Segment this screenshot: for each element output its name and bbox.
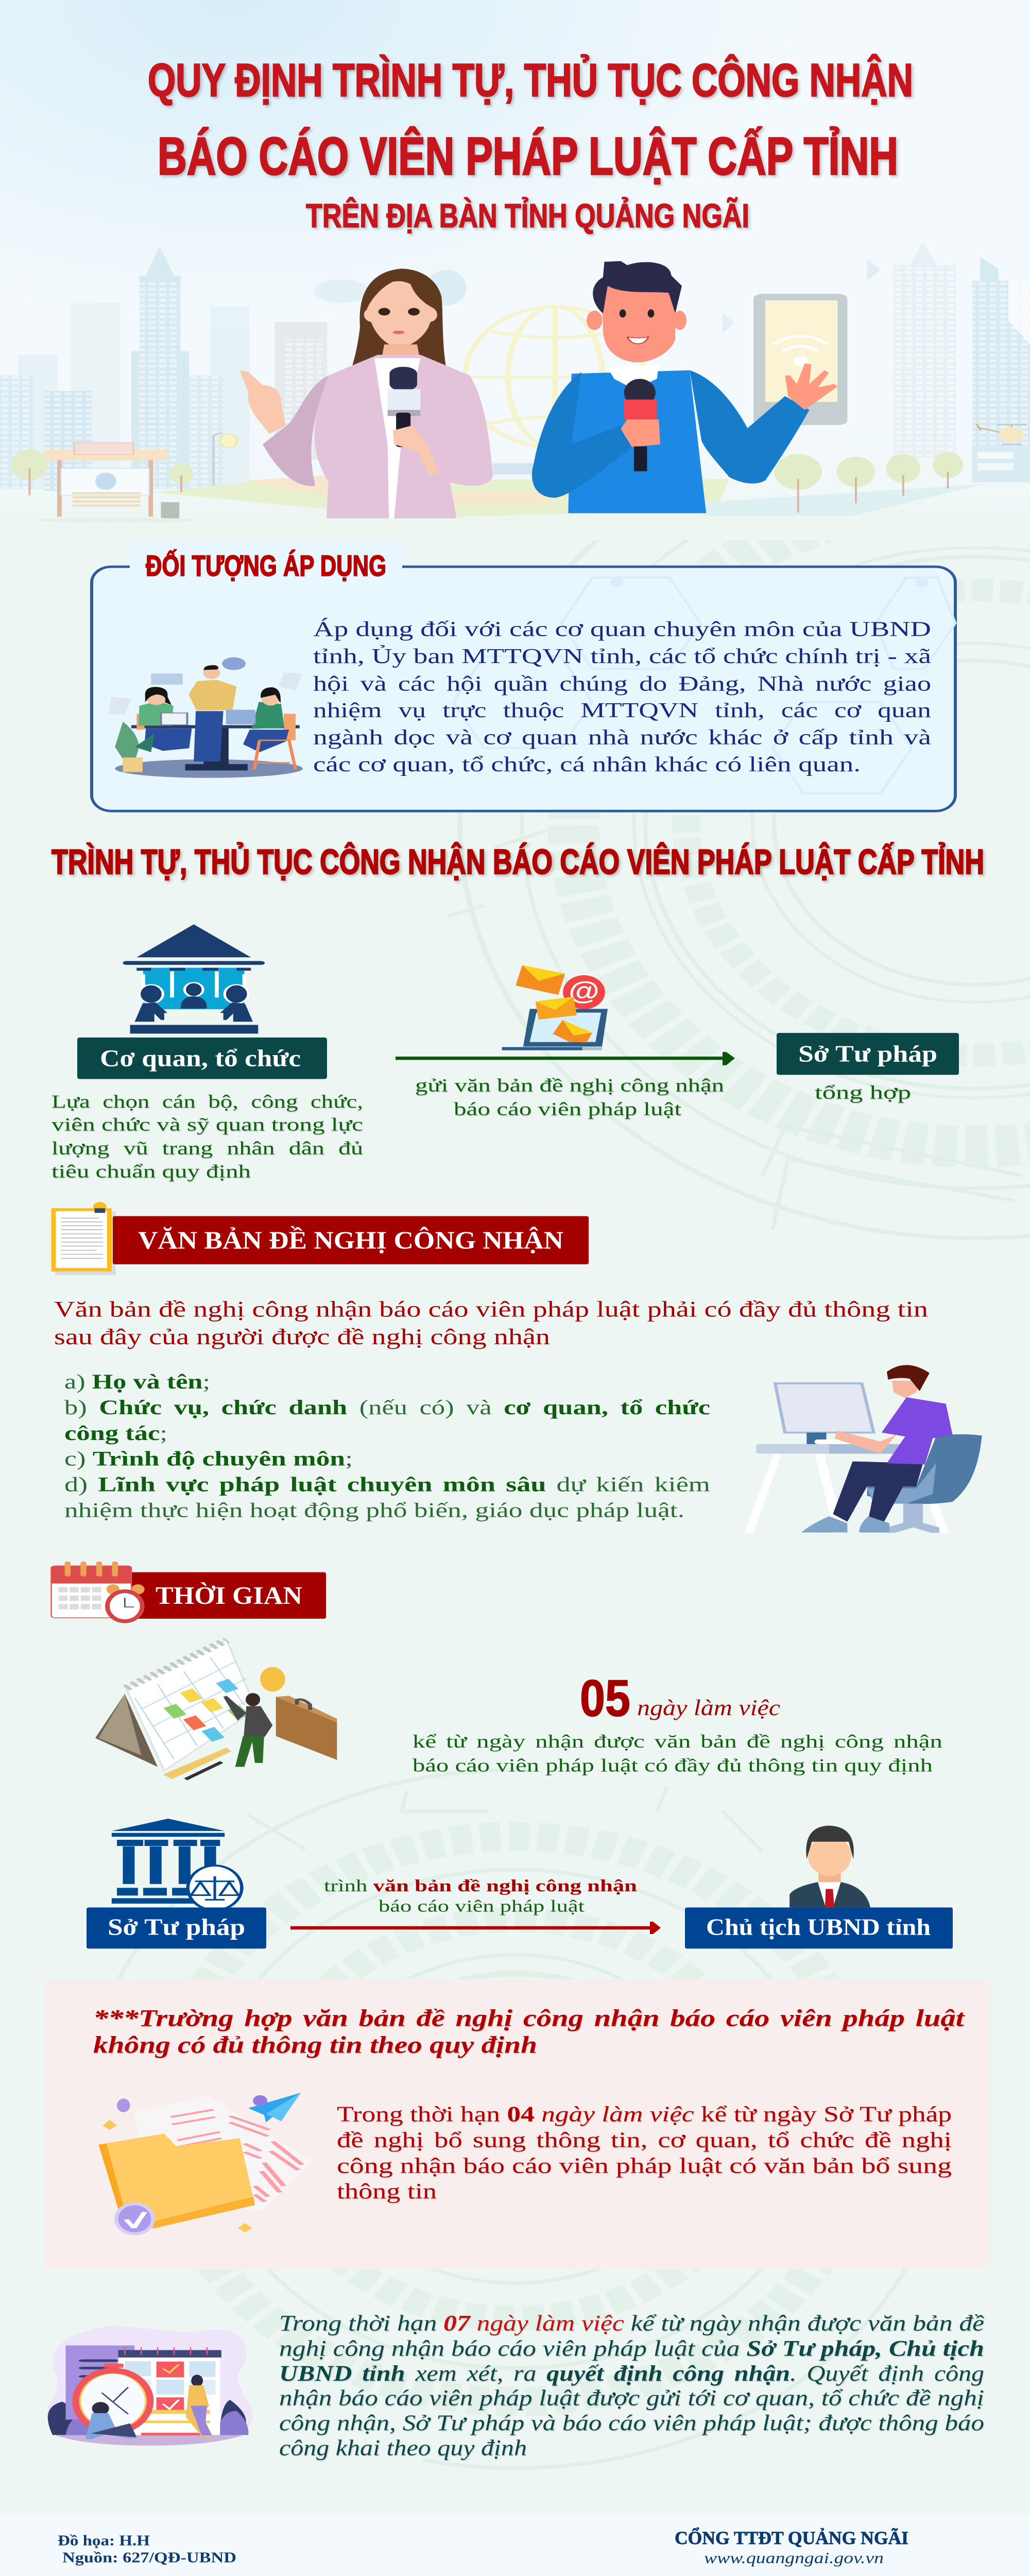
arrow caption: trình văn bản đề nghị công nhận [324,1877,637,1895]
box label: Cơ quan, tổ chức [100,1045,301,1072]
panel heading: không có đủ thông tin theo quy định [93,2032,537,2058]
arrow: gửi văn bản [396,1052,735,1065]
credits: Nguồn: 627/QĐ-UBND [62,2550,236,2566]
panel heading [93,2005,965,2058]
portal name: CỔNG TTĐT QUẢNG NGÃI [675,2527,908,2548]
final decision text: công khai theo quy định [279,2435,527,2460]
icon: email and laptop [502,965,608,1050]
bus stop [36,443,200,522]
caption: tổng hợp [815,1082,911,1103]
stat: 05 ngày làm việc: ngày làm việc [637,1695,780,1720]
time description: kể từ ngày nhận được văn bản đề nghị công nhận [413,1731,942,1752]
final decision text: UBND tỉnh xem xét, ra quyết định công nhận. Quyết định công [279,2361,984,2386]
icon: clipboard [51,1202,115,1275]
icon: email and laptop: @ [569,976,599,1005]
hero illustration: city and presenters [0,241,1030,540]
flow step: sở tư pháp to chủ tịch [87,1819,953,1948]
final decision text: nhận báo cáo viên pháp luật được gửi tới cơ quan, tổ chức đề nghị [279,2385,984,2410]
arrow caption: báo cáo viên pháp luật [379,1897,585,1916]
caption: gửi văn bản: báo cáo viên pháp luật [454,1099,681,1120]
stat: 05 ngày làm việc [580,1669,780,1727]
banner [131,1572,326,1619]
panel: đối tượng áp dụng [92,540,955,811]
panel heading: ***Trường hợp văn bản đề nghị công nhận báo cáo viên pháp luật [93,2005,965,2031]
section: thời gian [51,1563,326,1623]
background circuit pattern: upper [448,540,1030,1240]
box label: Chủ tịch UBND tỉnh [706,1915,931,1940]
icon: courthouse and scales [112,1819,242,1910]
banner label: VĂN BẢN ĐỀ NGHỊ CÔNG NHẬN [138,1226,563,1254]
box: sở tư pháp [87,1907,266,1948]
panel heading: ĐỐI TƯỢNG ÁP DỤNG [146,550,386,582]
panel body text [337,2103,952,2204]
box [777,1033,959,1075]
box [77,1038,327,1079]
icon: building with people [123,924,265,1033]
box label: Sở Tư pháp [798,1041,937,1067]
panel body text: ngành dọc và cơ quan nhà nước khác ở cấp tỉnh và [313,726,931,749]
helicopter [977,423,1027,444]
woman presenter [240,268,493,518]
banner label: THỜI GIAN [156,1581,302,1609]
banner [113,1216,589,1264]
title [148,54,913,234]
panel hexagon pattern [453,578,955,793]
caption: viên chức và sỹ quan trong lực [52,1114,363,1134]
man presenter [532,261,837,513]
caption: tiêu chuẩn quy định [52,1161,251,1181]
panel body text: hội và các hội quần chúng do Đảng, Nhà nước giao [313,672,931,696]
panel body text: công nhận báo cáo viên pháp luật có văn bản bổ sung [337,2154,952,2178]
background circuit pattern: lower [82,1770,948,2468]
panel body text: các cơ quan, tổ chức, cá nhân khác có liên quan. [313,753,861,776]
city skyline [0,241,1030,491]
panel body text: Áp dụng đối với các cơ quan chuyên môn của UBND [313,618,931,641]
intro text [54,1297,928,1349]
panel body text: nhiệm vụ trực thuộc MTTQVN tỉnh, các cơ quan [313,699,931,722]
globe [465,307,645,448]
panel: trường hợp không đủ thông tin [43,1979,990,2269]
credits: Đồ họa: H.H [58,2532,150,2549]
caption: Lựa chọn cán bộ, công chức, [52,1091,363,1112]
caption: gửi văn bản: gửi văn bản đề nghị công nhận [415,1075,724,1096]
arrow [290,1922,661,1934]
box: chủ tịch [685,1907,953,1948]
stat: 05 ngày làm việc: 05 [580,1669,630,1727]
icon: person at desk [744,1365,982,1533]
final decision text [279,2310,984,2460]
trees [11,449,963,513]
section: văn bản đề nghị công nhận [51,1202,589,1275]
title: TRÊN ĐỊA BÀN TỈNH QUẢNG NGÃI [306,197,749,234]
panel body text: đề nghị bổ sung thông tin, cơ quan, tổ chức đề nghị [337,2128,952,2153]
icon: folder with documents [98,2093,312,2235]
intro text: sau đây của người được đề nghị công nhận [54,1324,550,1349]
footer [0,2515,1030,2576]
arrow caption [324,1877,637,1916]
requirement list [64,1370,710,1521]
requirement list: a) Họ và tên; [64,1370,210,1393]
ground [0,476,1030,540]
phone screen [753,294,847,425]
panel body text: thông tin [337,2180,437,2204]
requirement list: c) Trình độ chuyên môn ; [64,1447,353,1470]
icon: wall calendar planning [95,1640,337,1780]
time description: báo cáo viên pháp luật có đầy đủ thông tin quy định [413,1755,933,1776]
caption [52,1091,363,1181]
panel body text: tỉnh, Ủy ban MTTQVN tỉnh, các tổ chức chính trị - xã [313,645,931,668]
icon: team meeting [108,657,303,778]
portal url: www.quangngai.gov.vn [704,2549,884,2567]
street lamp [214,433,237,486]
final decision text: nghị công nhận báo cáo viên pháp luật của Sở Tư pháp, Chủ tịch [279,2336,984,2361]
flow step: sở tư pháp [777,1033,959,1103]
icon: calendar and clock [51,1563,145,1623]
panel body text: Trong thời hạn 04 ngày làm việc kể từ ngày Sở Tư pháp [337,2103,952,2127]
flow step: cơ quan tổ chức [52,924,363,1181]
intro text: Văn bản đề nghị công nhận báo cáo viên pháp luật phải có đầy đủ thông tin [54,1297,928,1321]
panel body text [313,618,931,776]
caption: lượng vũ trang nhân dân đủ [52,1138,363,1158]
requirement list: b) Chức vụ, chức danh (nếu có) và cơ quan, tổ chức [64,1396,710,1419]
requirement list: d) Lĩnh vực pháp luật chuyên môn sâu dự kiến kiêm [64,1473,710,1496]
caption: gửi văn bản [415,1075,724,1120]
icon: chairman [789,1825,870,1907]
credits [58,2532,236,2566]
final decision text: công nhận, Sở Tư pháp và báo cáo viên pháp luật; được thông báo [279,2410,984,2435]
time description [413,1731,942,1776]
requirement list: công tác; [64,1422,167,1445]
icon: clock and calendar illustration [47,2326,253,2446]
final decision text: Trong thời hạn 07 ngày làm việc kể từ ngày nhận được văn bản đề [279,2310,984,2335]
box label: Sở Tư pháp [108,1915,245,1940]
requirement list: nhiệm thực hiện hoạt động phổ biến, giáo dục pháp luật. [64,1499,684,1521]
